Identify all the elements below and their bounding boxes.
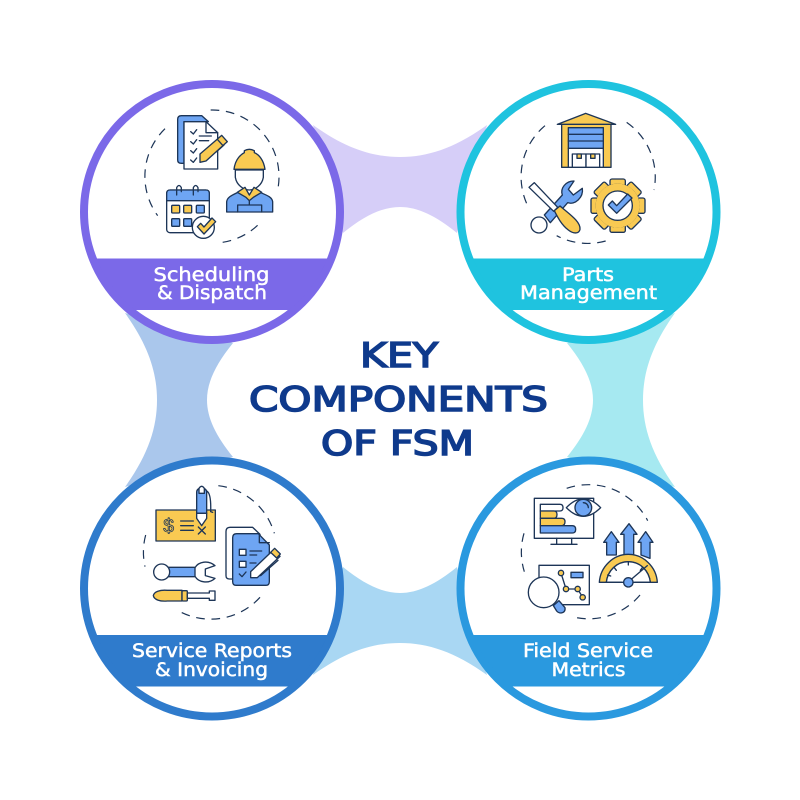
label: service reports and invoicing: & Invoicing [155, 660, 268, 681]
label: scheduling and dispatch: Scheduling [154, 265, 270, 286]
label: parts management: Parts [562, 265, 614, 286]
connector: left blue band [125, 313, 233, 487]
banner: service reports and invoicing [97, 635, 327, 686]
label: parts management [520, 265, 657, 304]
icon: service reports and invoicing: $ [163, 516, 174, 537]
title: COMPONENTS [249, 380, 548, 420]
banner: scheduling and dispatch [97, 258, 327, 310]
label: service reports and invoicing: Service Reports [132, 641, 292, 662]
label: field service metrics: Metrics [552, 660, 626, 681]
banner: field service metrics [474, 635, 704, 686]
connector: bottom light blue band [313, 567, 487, 675]
label: parts management: Management [520, 283, 657, 304]
label: service reports and invoicing [132, 641, 292, 681]
label: scheduling and dispatch [154, 265, 270, 304]
title: OF FSM [321, 424, 474, 464]
label: field service metrics: Field Service [523, 641, 653, 662]
icon: parts management [521, 113, 655, 243]
icon: scheduling and dispatch [145, 110, 279, 242]
connector: right cyan band [567, 313, 675, 487]
title [249, 336, 548, 464]
panel: parts management [456, 84, 721, 340]
panel: field service metrics [456, 460, 721, 716]
banner: parts management [474, 258, 704, 310]
connector: top purple band [313, 125, 487, 233]
label: field service metrics [523, 641, 653, 681]
icon: field service metrics [521, 485, 657, 619]
panel: scheduling and dispatch [80, 84, 344, 340]
icon: service reports and invoicing [143, 486, 280, 619]
title: KEY [360, 336, 438, 376]
panel: service reports and invoicing [80, 460, 344, 716]
label: scheduling and dispatch: & Dispatch [157, 283, 267, 304]
